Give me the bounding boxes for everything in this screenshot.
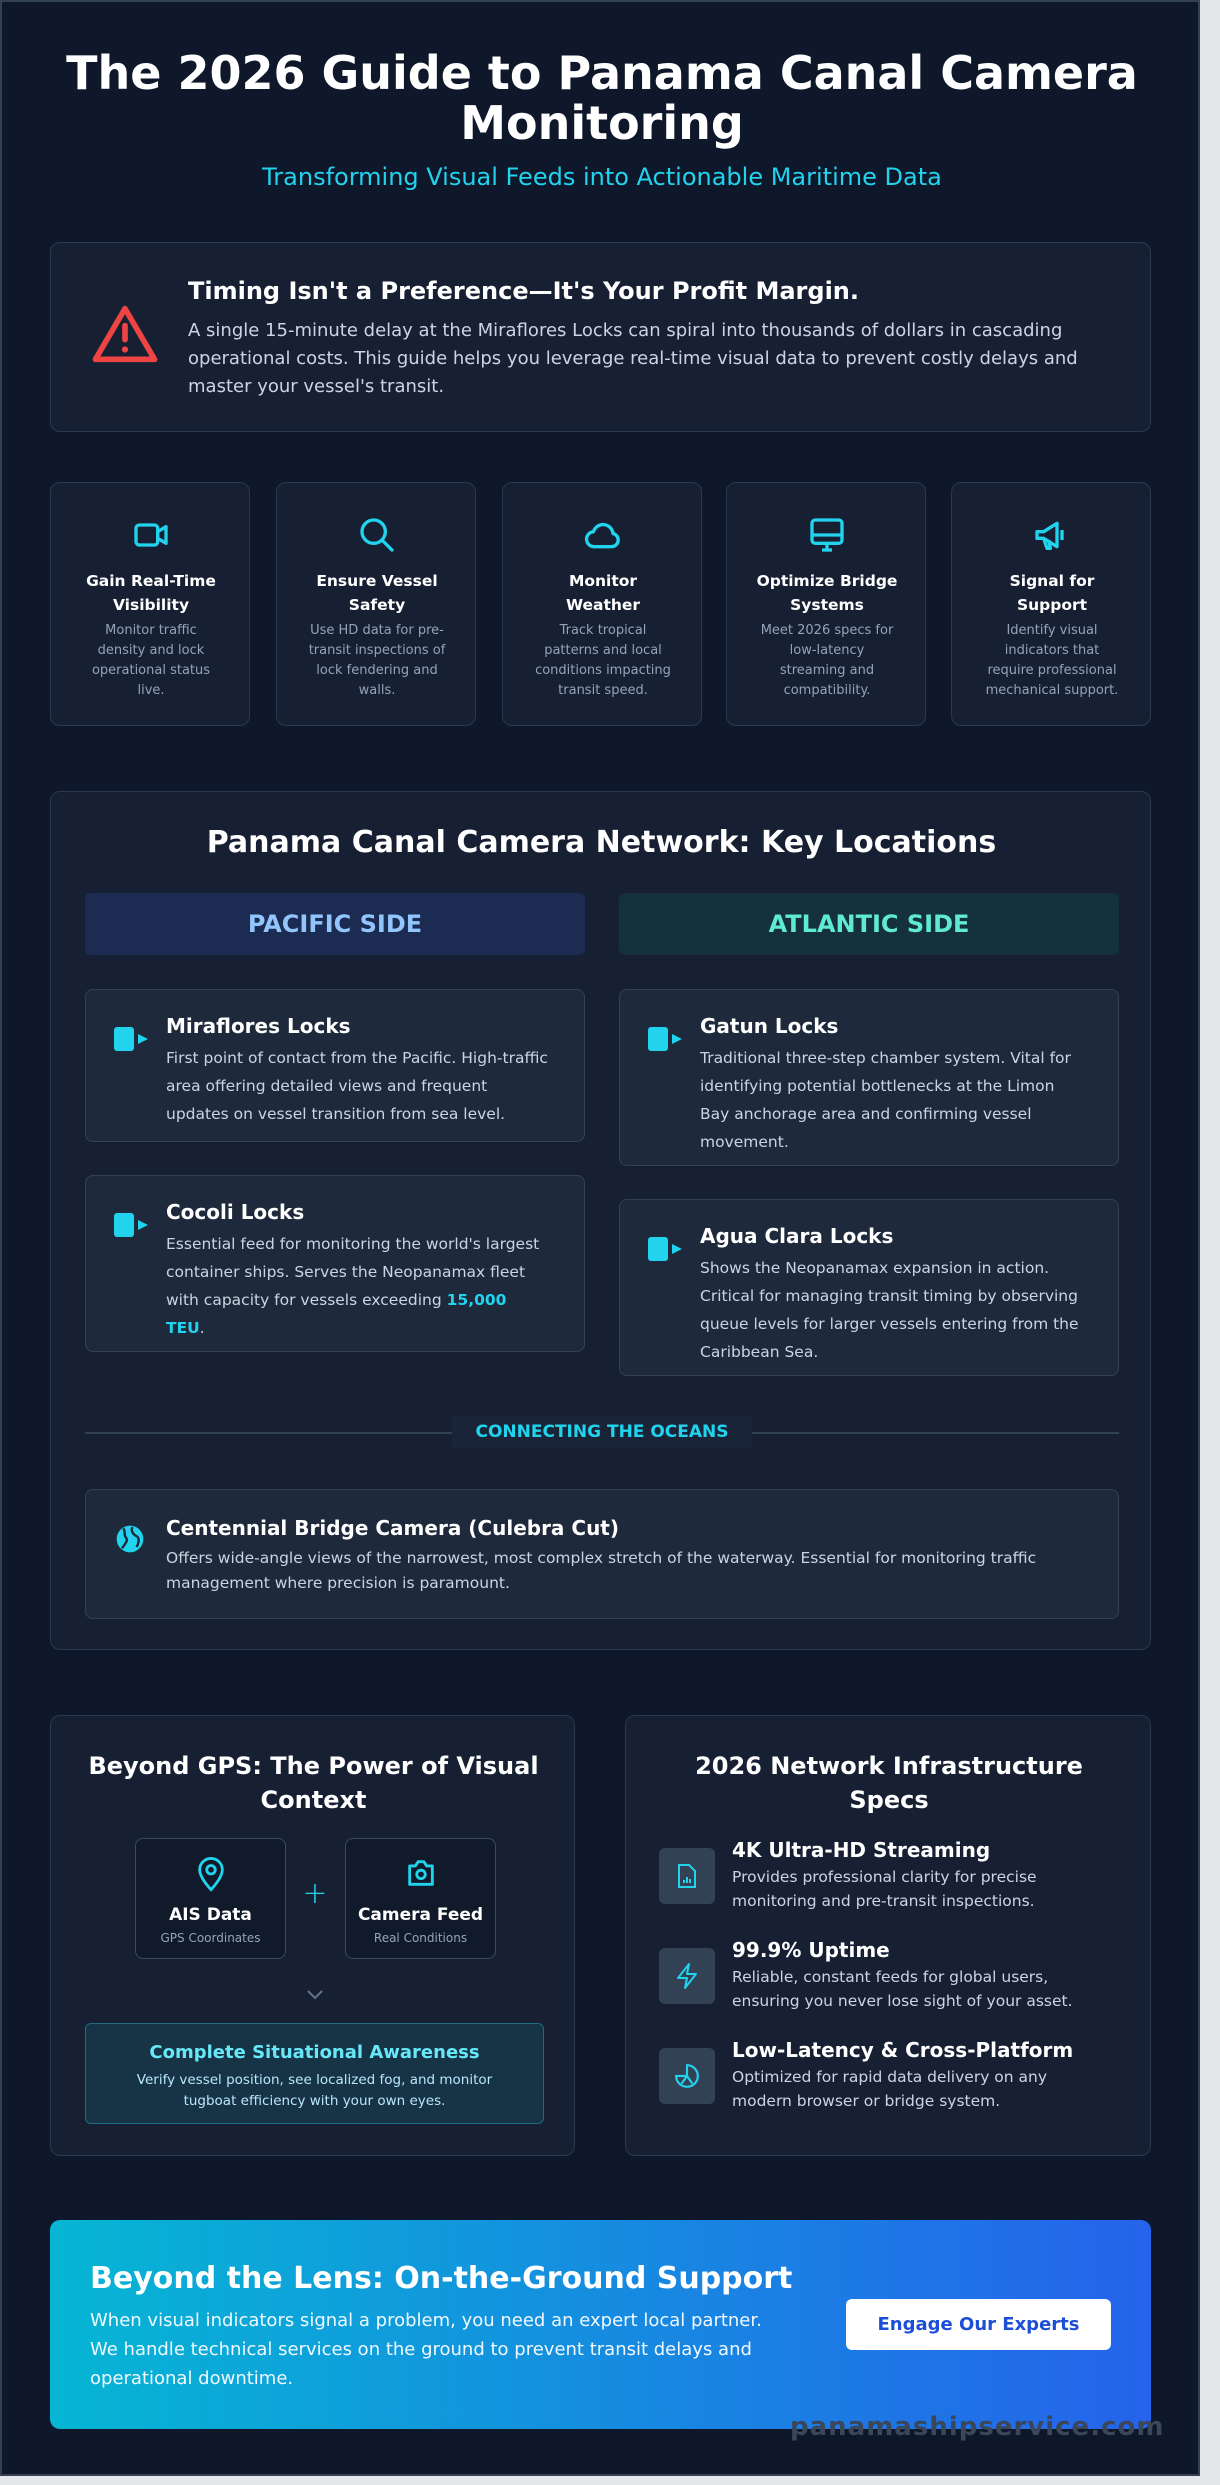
location: miraflores: First point of contact from the Pacific. High-traffic xyxy=(166,1049,548,1067)
icon: bolt xyxy=(659,1948,715,2004)
location: cocoli: TEU. xyxy=(166,1319,205,1337)
spec: uptime: ensuring you never lose sight of your asset. xyxy=(732,1992,1073,2010)
divider label xyxy=(452,1416,752,1448)
icon: file chart xyxy=(659,1848,715,1904)
box: camera feed xyxy=(345,1838,496,1959)
header: pacific: PACIFIC SIDE xyxy=(248,910,422,938)
feature card: safety xyxy=(276,482,476,726)
feature card: weather: transit speed. xyxy=(558,683,648,698)
feature card: safety: transit inspections of xyxy=(309,643,445,658)
location: agua clara: Shows the Neopanamax expansion in action. xyxy=(700,1259,1049,1277)
icon: video xyxy=(134,523,168,547)
location: centennial bridge: Centennial Bridge Camera (Culebra Cut) xyxy=(166,1516,619,1540)
feature card: weather: Monitor xyxy=(569,572,637,590)
icon: search xyxy=(360,518,394,552)
location: agua clara: Caribbean Sea. xyxy=(700,1343,818,1361)
feature card: visibility: Visibility xyxy=(113,596,189,614)
location: gatun: Gatun Locks xyxy=(700,1014,838,1038)
spec: 4K: monitoring and pre-transit inspections. xyxy=(732,1892,1035,1910)
title: Monitoring xyxy=(460,96,744,150)
panel: camera network xyxy=(50,791,1151,1650)
callout: situational awareness: tugboat efficiency with your own eyes. xyxy=(184,2093,445,2109)
icon: globe xyxy=(116,1526,144,1552)
location: cocoli: Cocoli Locks xyxy=(166,1200,304,1224)
alert body: master your vessel's transit. xyxy=(188,376,444,397)
location: cocoli: with capacity for vessels exceeding 15,000 xyxy=(166,1291,506,1309)
location: agua clara xyxy=(619,1199,1119,1376)
feature card: visibility: Monitor traffic xyxy=(105,623,197,638)
icon: cloud xyxy=(584,522,620,548)
title xyxy=(66,46,1138,150)
feature card: safety: lock fendering and xyxy=(316,663,438,678)
spec: low latency: modern browser or bridge system. xyxy=(732,2092,1000,2110)
alert body: operational costs. This guide helps you leverage real-time visual data to prevent costly delays and xyxy=(188,348,1078,369)
feature card: bridge systems: streaming and xyxy=(780,663,874,678)
location: cocoli xyxy=(85,1175,585,1352)
location: miraflores: area offering detailed views and frequent xyxy=(166,1077,487,1095)
CTA body xyxy=(90,2310,762,2389)
feature card: bridge systems: compatibility. xyxy=(784,683,870,698)
location: gatun xyxy=(619,989,1119,1166)
box: AIS data: AIS Data xyxy=(169,1905,252,1925)
subtitle: Transforming Visual Feeds into Actionable Maritime Data xyxy=(262,163,942,191)
location: gatun: Traditional three-step chamber system. Vital for xyxy=(700,1049,1071,1067)
feature card: support xyxy=(951,482,1151,726)
location: centennial bridge: management where precision is paramount. xyxy=(166,1574,510,1592)
heading: 2026 Network Infrastructure xyxy=(695,1752,1083,1780)
feature card: support: require professional xyxy=(987,663,1117,678)
alert body xyxy=(188,320,1078,397)
feature card: support: Support xyxy=(1017,596,1087,614)
box: AIS data: GPS Coordinates xyxy=(160,1931,260,1945)
spec: uptime: Reliable, constant feeds for global users, xyxy=(732,1968,1048,1986)
spec: 4K: Provides professional clarity for precise xyxy=(732,1868,1037,1886)
divider label: CONNECTING THE OCEANS xyxy=(475,1422,729,1442)
spec: low latency: Optimized for rapid data delivery on any xyxy=(732,2068,1047,2086)
location: gatun: movement. xyxy=(700,1133,789,1151)
feature card: bridge systems: Meet 2026 specs for xyxy=(761,623,893,638)
location: centennial bridge: Offers wide-angle views of the narrowest, most complex stretch of the waterway. Essential for monitoring traffic xyxy=(166,1549,1036,1567)
feature card: weather: conditions impacting xyxy=(535,663,671,678)
icon: warning xyxy=(92,306,158,362)
CTA button xyxy=(846,2299,1111,2350)
icon: pie xyxy=(659,2048,715,2104)
panel: beyond GPS xyxy=(50,1715,575,2156)
feature card: safety: Ensure Vessel xyxy=(316,572,438,590)
chevron xyxy=(307,1990,323,2000)
icon: camera xyxy=(648,1237,682,1261)
location: miraflores: Miraflores Locks xyxy=(166,1014,351,1038)
icon: camera xyxy=(648,1027,682,1051)
spec: low latency xyxy=(659,2038,1073,2110)
feature card: visibility: Gain Real-Time xyxy=(86,572,216,590)
feature card: weather xyxy=(502,482,702,726)
heading: Context xyxy=(261,1786,366,1814)
callout: situational awareness: Verify vessel position, see localized fog, and monitor xyxy=(137,2072,492,2088)
icon: camera xyxy=(114,1027,148,1051)
panel: infrastructure specs xyxy=(625,1715,1151,2156)
location: agua clara: Agua Clara Locks xyxy=(700,1224,893,1248)
spec: low latency: Low-Latency & Cross-Platform xyxy=(732,2038,1073,2062)
location: centennial bridge xyxy=(85,1489,1119,1619)
box: AIS data xyxy=(135,1838,286,1959)
feature card: bridge systems xyxy=(726,482,926,726)
spec: 4K: 4K Ultra-HD Streaming xyxy=(732,1838,990,1862)
header: atlantic xyxy=(619,893,1119,955)
title: The 2026 Guide to Panama Canal Camera xyxy=(66,46,1138,100)
alert body: A single 15-minute delay at the Miraflores Locks can spiral into thousands of dollars in cascading xyxy=(188,320,1062,341)
feature card: support: Identify visual xyxy=(1006,623,1098,638)
heading: Beyond GPS: The Power of Visual xyxy=(88,1752,539,1780)
box: camera feed: Camera Feed xyxy=(358,1905,483,1925)
feature card: weather: Track tropical xyxy=(560,623,646,638)
spec: uptime: 99.9% Uptime xyxy=(732,1938,890,1962)
location: miraflores xyxy=(85,989,585,1142)
CTA banner xyxy=(50,2220,1151,2429)
feature card: support: Signal for xyxy=(1010,572,1094,590)
feature card: safety: Safety xyxy=(349,596,405,614)
header: pacific xyxy=(85,893,585,955)
feature card: safety: walls. xyxy=(359,683,395,698)
icon: pin xyxy=(198,1857,224,1892)
location: miraflores: updates on vessel transition from sea level. xyxy=(166,1105,505,1123)
spec: 4K xyxy=(659,1838,1037,1910)
callout: situational awareness: Complete Situational Awareness xyxy=(149,2042,480,2063)
icon: camera xyxy=(114,1213,148,1237)
location: gatun: Bay anchorage area and confirming vessel xyxy=(700,1105,1032,1123)
watermark: panamashipservice.com xyxy=(790,2412,1164,2442)
icon: camera xyxy=(408,1860,434,1886)
CTA button: Engage Our Experts xyxy=(878,2314,1079,2335)
feature card: bridge systems: Optimize Bridge xyxy=(757,572,897,590)
location: agua clara: Critical for managing transit timing by observing xyxy=(700,1287,1078,1305)
feature card: support: mechanical support. xyxy=(986,683,1118,698)
heading xyxy=(695,1752,1083,1814)
location: gatun: identifying potential bottlenecks at the Limon xyxy=(700,1077,1054,1095)
CTA body: When visual indicators signal a problem, you need an expert local partner. xyxy=(90,2310,762,2331)
feature card: safety: Use HD data for pre- xyxy=(310,623,444,638)
plus sign: + xyxy=(302,1876,328,1911)
location: agua clara: queue levels for larger vessels entering from the xyxy=(700,1315,1079,1333)
panel: alert xyxy=(50,242,1151,432)
feature card: support: indicators that xyxy=(1005,643,1099,658)
feature card: visibility xyxy=(50,482,250,726)
feature card: weather: patterns and local xyxy=(544,643,662,658)
CTA heading: Beyond the Lens: On-the-Ground Support xyxy=(90,2261,792,2296)
location: cocoli: Essential feed for monitoring the world's largest xyxy=(166,1235,539,1253)
CTA body: operational downtime. xyxy=(90,2368,293,2389)
heading xyxy=(88,1752,539,1814)
feature card: bridge systems: low-latency xyxy=(790,643,864,658)
CTA body: We handle technical services on the ground to prevent transit delays and xyxy=(90,2339,752,2360)
box: camera feed: Real Conditions xyxy=(374,1931,467,1945)
header: atlantic: ATLANTIC SIDE xyxy=(769,910,969,938)
feature card: weather: Weather xyxy=(566,596,640,614)
feature card: visibility: live. xyxy=(137,683,165,698)
alert heading: Timing Isn't a Preference—It's Your Profit Margin. xyxy=(188,277,859,305)
location: cocoli: container ships. Serves the Neopanamax fleet xyxy=(166,1263,525,1281)
callout: situational awareness xyxy=(85,2023,544,2124)
feature card: visibility: operational status xyxy=(92,663,210,678)
feature card: bridge systems: Systems xyxy=(790,596,864,614)
spec: uptime xyxy=(659,1938,1073,2010)
feature card: visibility: density and lock xyxy=(98,643,204,658)
icon: monitor xyxy=(810,518,844,552)
network heading: Panama Canal Camera Network: Key Locations xyxy=(207,825,996,860)
heading: Specs xyxy=(849,1786,929,1814)
icon: megaphone xyxy=(1035,522,1064,550)
